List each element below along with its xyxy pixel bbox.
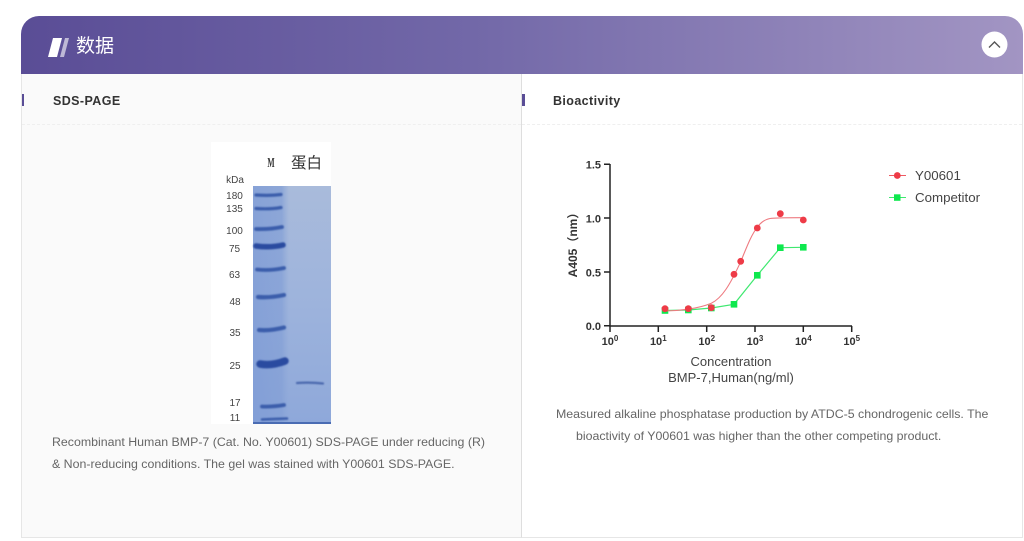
- x tick labels: 0: [614, 334, 619, 343]
- heading: Bioactivity: Bioactivity: [553, 94, 621, 108]
- marker: Bioactivity heading: [522, 94, 525, 106]
- heading: SDS-PAGE: SDS-PAGE: [53, 94, 121, 108]
- header bar: [21, 16, 1023, 74]
- chart: bioactivity dose response: [566, 160, 981, 385]
- icon: slanted bars: [48, 38, 69, 57]
- axes: [604, 164, 852, 332]
- icon: collapse button: [982, 32, 1008, 58]
- gel background: [253, 186, 331, 424]
- text: SDS-PAGE caption: & Non-reducing conditions. The gel was stained with Y00601 SDS-PAGE.: [52, 457, 455, 471]
- kDa labels: 100: [226, 226, 243, 237]
- series: Y00601: [662, 210, 807, 312]
- text: bioactivity caption: bioactivity of Y00601 was higher than the other competing product.: [576, 429, 941, 443]
- y tick labels: 1.0: [586, 214, 601, 226]
- text: bioactivity caption: Measured alkaline phosphatase production by ATDC-5 chondrogenic cells. The: [556, 406, 988, 420]
- kDa labels: 48: [229, 297, 241, 308]
- legend: Y00601: [915, 168, 961, 183]
- panel: bioactivity: [521, 73, 1023, 538]
- marker bands: [256, 194, 323, 420]
- kDa labels: 180: [226, 191, 243, 202]
- divider left: [22, 124, 521, 125]
- y tick labels: 0.5: [586, 268, 601, 280]
- x tick labels: 10: [698, 336, 711, 348]
- y tick labels: 1.5: [586, 160, 601, 172]
- y tick labels: 0.0: [586, 321, 601, 333]
- y axis title: A405（nm）: [566, 207, 580, 277]
- divider right: [522, 124, 1022, 125]
- kDa labels: [226, 175, 244, 424]
- x tick labels: 10: [602, 336, 614, 348]
- x tick labels: [602, 334, 861, 348]
- gel image: 蛋白: [291, 154, 322, 172]
- x tick labels: 5: [856, 334, 861, 343]
- marker: SDS-PAGE heading: [22, 94, 24, 106]
- x tick labels: 10: [843, 336, 856, 348]
- x tick labels: 2: [711, 334, 716, 343]
- x tick labels: 1: [662, 334, 667, 343]
- x tick labels: 10: [650, 336, 662, 348]
- y tick labels: [586, 160, 601, 333]
- kDa labels: 17: [229, 398, 241, 409]
- legend: Competitor: [915, 190, 981, 205]
- x tick labels: 3: [759, 334, 764, 343]
- kDa labels: 135: [226, 204, 243, 215]
- kDa labels: 11: [230, 413, 241, 424]
- kDa labels: 75: [229, 244, 240, 255]
- heading: data: 数据: [76, 36, 114, 57]
- text: SDS-PAGE caption: Recombinant Human BMP-7 (Cat. No. Y00601) SDS-PAGE under reducing (R): [52, 434, 485, 448]
- x axis title: Concentration: [691, 354, 771, 369]
- x tick labels: 4: [807, 334, 812, 343]
- kDa labels: 35: [229, 328, 241, 339]
- kDa labels: kDa: [226, 175, 244, 186]
- legend: [889, 168, 981, 205]
- kDa labels: 63: [229, 270, 240, 281]
- x axis title: [668, 354, 794, 385]
- x axis title: BMP-7,Human(ng/ml): [668, 370, 794, 385]
- x tick labels: 10: [795, 336, 807, 348]
- lane labels: M: [267, 156, 275, 171]
- series: competitor: [662, 244, 807, 314]
- text: SDS-PAGE caption: [52, 434, 485, 471]
- text: bioactivity caption: [556, 406, 988, 443]
- kDa labels: 25: [229, 361, 241, 372]
- gel image: [226, 154, 331, 424]
- x tick labels: 10: [747, 336, 759, 348]
